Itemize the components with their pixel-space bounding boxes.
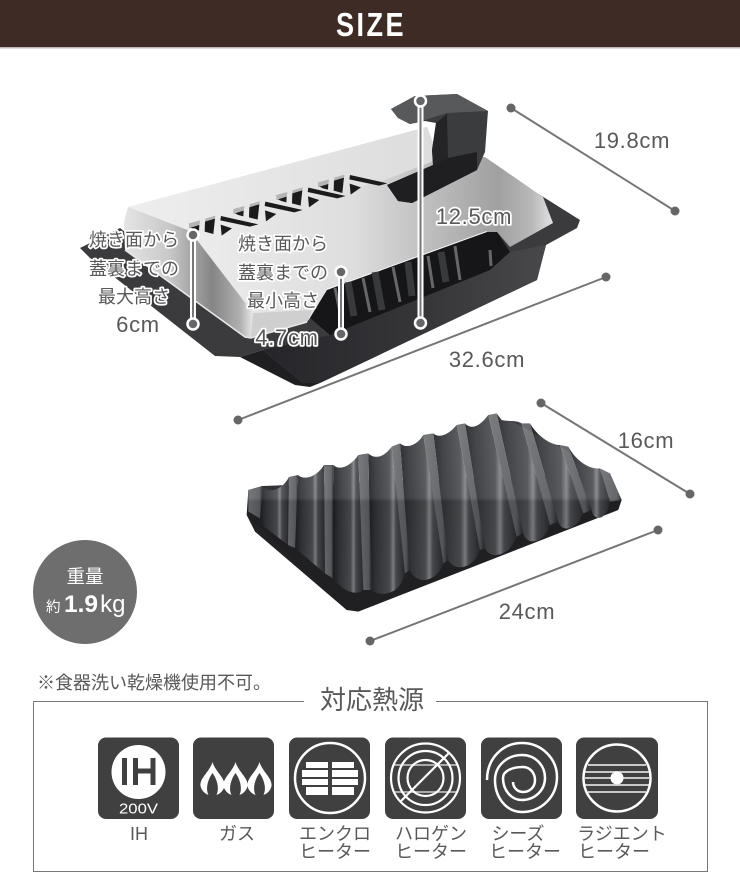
icon: IH 200V [98,738,179,819]
weight badge [33,540,137,644]
label: radiant heater [577,824,667,862]
weight badge: 約 [46,599,60,616]
height marker: maximum 6cm: 最大高さ [98,287,170,307]
lid vent slots [189,175,387,236]
dimension line: length 32.6cm [234,272,610,424]
header bar: SIZE [336,8,406,44]
label: radiant heater: ラジエント [577,824,667,844]
dimension line: lid depth 19.8cm: 19.8cm [594,128,670,153]
height marker: minimum 4.7cm: 焼き面から [238,234,328,254]
panel: compatible heat sources [34,685,708,872]
label: halogen heater: ハロゲン [395,824,467,844]
dimension line: lid depth 19.8cm [506,104,680,216]
note: ※食器洗い乾燥機使用不可。 [37,673,271,693]
icon: halogen heater [385,738,466,819]
label: gas: ガス [219,824,255,844]
height marker: minimum 4.7cm: 最小高さ [247,291,319,311]
pan body [80,193,580,383]
header bar [0,0,740,48]
label: halogen heater [395,824,467,862]
height marker: minimum 4.7cm: 蓋裏までの [238,263,328,283]
label: encro heater: エンクロ [299,824,371,844]
weight badge: 重量 [66,566,104,587]
height marker: minimum 4.7cm: 4.7cm [255,325,319,350]
height marker: maximum 6cm: 6cm [116,312,160,337]
panel heading: 対応熱源 [320,685,424,715]
lid front face [124,127,553,338]
dimension line: plate length 24cm: 24cm [499,599,555,624]
lid lower lip [251,310,312,338]
plate base [247,473,622,612]
lid window showing dark plate [310,232,510,335]
grooves [260,477,289,545]
height marker: maximum 6cm: 焼き面から [89,230,179,250]
label: radiant heater: ヒーター [578,842,650,862]
dimension line: length 32.6cm: 32.6cm [449,347,525,372]
reflection band [248,414,621,582]
dimension line: plate depth 16cm [536,398,694,498]
label: sheathed heater [489,824,561,862]
icon: gas flames [193,738,274,819]
label: encro heater [299,824,371,862]
handle [387,94,488,203]
icon: encro heater [289,738,370,819]
icon: IH 200V: 200V [119,800,158,818]
label: sheathed heater: シーズ [491,824,545,844]
label: halogen heater: ヒーター [395,842,467,862]
label: IH: IH [130,824,148,844]
lid end face [124,207,253,338]
height marker: maximum 6cm [89,230,198,337]
icon: radiant heater [576,738,658,819]
lid top face [128,127,436,231]
label: sheathed heater: ヒーター [489,842,561,862]
dimension line: plate depth 16cm: 16cm [618,428,674,453]
icon: sheathed heater [481,738,562,819]
ridges [248,486,263,518]
weight badge: 1.9kg [64,591,125,618]
height marker: minimum 4.7cm [238,234,346,350]
dimension line: plate length 24cm [366,526,662,646]
height marker: 12.5cm: 12.5cm [436,204,512,229]
label: encro heater: ヒーター [299,842,371,862]
product photo: corrugated grill plate [243,413,623,613]
product photo: grill pan with lid [80,94,580,387]
height marker: 12.5cm [415,96,512,328]
height marker: maximum 6cm: 蓋裏までの [89,259,179,279]
